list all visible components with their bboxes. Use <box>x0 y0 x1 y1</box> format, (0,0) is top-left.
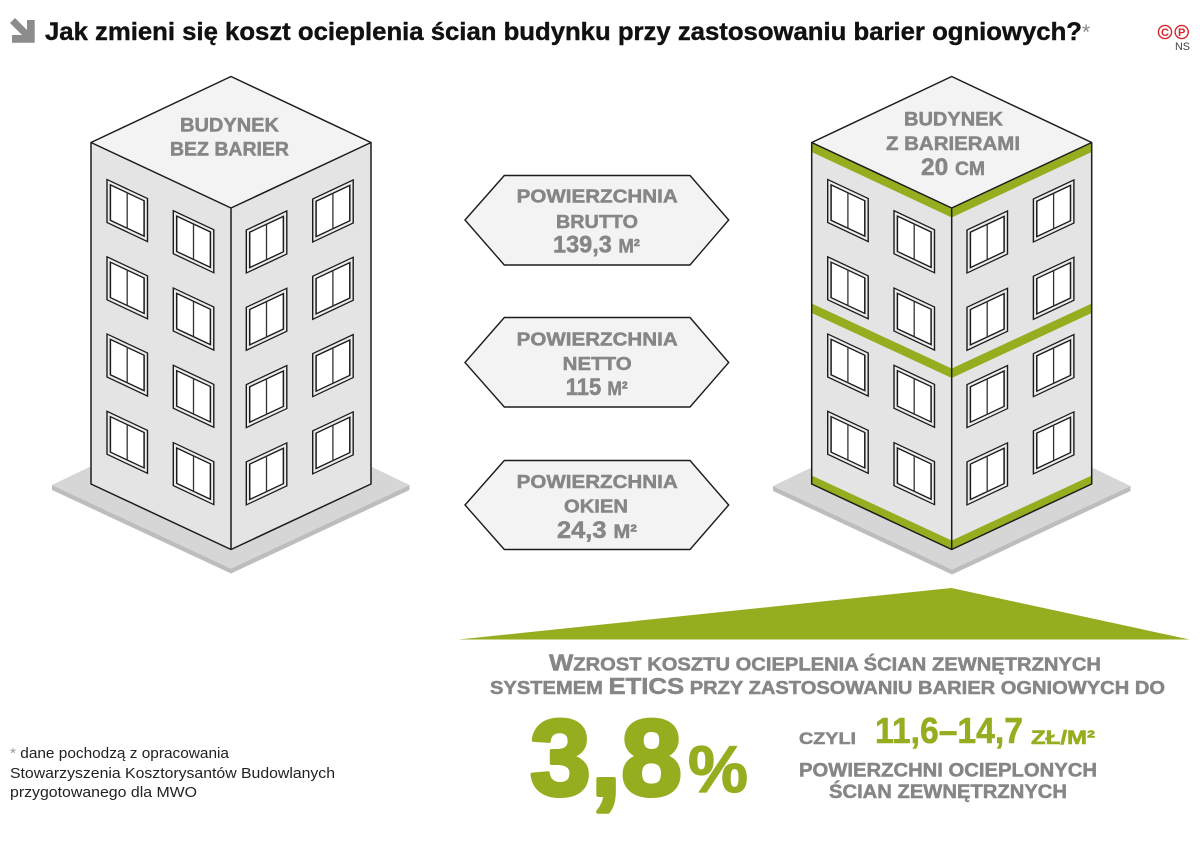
big percentage figure <box>530 697 748 818</box>
roof <box>91 76 371 208</box>
roof label: BUDYNEK <box>904 108 1003 130</box>
building without barriers <box>52 76 410 574</box>
roof label <box>886 108 1020 181</box>
title footnote asterisk: * <box>1082 21 1090 44</box>
ground platform <box>52 399 410 574</box>
outlines <box>91 76 371 550</box>
source footnote <box>10 745 335 801</box>
label: gross area: BRUTTO <box>556 211 638 232</box>
ground platform <box>773 400 1130 574</box>
logo: copyright marks and NS signature: C <box>1161 27 1169 39</box>
source footnote: Stowarzyszenia Kosztorysantów Budowlanych <box>10 765 335 782</box>
windows <box>828 180 1074 505</box>
label: net area: 115 M² <box>566 374 628 401</box>
roof <box>812 76 1092 208</box>
logo: copyright marks and NS signature: P <box>1178 27 1185 39</box>
label: window area: OKIEN <box>564 496 628 517</box>
label: net area: NETTO <box>563 353 632 374</box>
cost per square metre: CZYLI <box>799 729 856 748</box>
label: gross area <box>465 176 729 265</box>
roof label: BUDYNEK <box>180 115 279 137</box>
roof label: Z BARIERAMI <box>886 133 1020 155</box>
green barrier bands <box>812 142 1092 550</box>
label: window area <box>465 460 729 550</box>
logo: copyright marks and NS signature <box>1158 25 1190 53</box>
label: window area: POWIERZCHNIA <box>517 471 678 492</box>
cost per square metre: ZŁ/M² <box>1031 728 1095 749</box>
label: window area: 24,3 M² <box>557 517 637 544</box>
source footnote: przygotowanego dla MWO <box>10 784 197 801</box>
source footnote: * dane pochodzą z opracowania <box>10 745 230 762</box>
big percentage figure: 3,8 <box>530 697 682 818</box>
walls <box>91 142 371 550</box>
label: gross area: POWIERZCHNIA <box>517 186 678 207</box>
logo: copyright marks and NS signature: NS <box>1175 41 1190 53</box>
cost increase heading: SYSTEMEM ETICS PRZY ZASTOSOWANIU BARIER OGNIOWYCH DO <box>490 673 1165 699</box>
label: net area <box>465 318 729 407</box>
label: net area: POWIERZCHNIA <box>517 328 678 349</box>
roof label <box>170 115 289 161</box>
cost per square metre <box>799 710 1097 803</box>
roof label: 20 CM <box>921 154 985 181</box>
cost increase heading <box>490 650 1165 699</box>
green roof-shaped pointer <box>458 588 1190 640</box>
cost increase heading: WZROST KOSZTU OCIEPLENIA ŚCIAN ZEWNĘTRZNYCH <box>549 650 1101 676</box>
big percentage figure: % <box>688 732 748 806</box>
label: gross area: 139,3 M² <box>553 231 640 258</box>
title: Jak zmieni się koszt ocieplenia ścian budynku przy zastosowaniu barier ogniowych? <box>45 18 1082 46</box>
cost per square metre: ŚCIAN ZEWNĘTRZNYCH <box>829 781 1067 803</box>
roof label: BEZ BARIER <box>170 139 289 161</box>
walls <box>812 142 1092 550</box>
cost per square metre: 11,6–14,7 <box>875 710 1023 751</box>
cost per square metre: POWIERZCHNI OCIEPLONYCH <box>799 761 1097 782</box>
building with fire barriers <box>773 76 1130 574</box>
icon: arrow pointing down-right <box>10 18 35 43</box>
outlines <box>812 76 1092 550</box>
windows <box>107 180 353 505</box>
